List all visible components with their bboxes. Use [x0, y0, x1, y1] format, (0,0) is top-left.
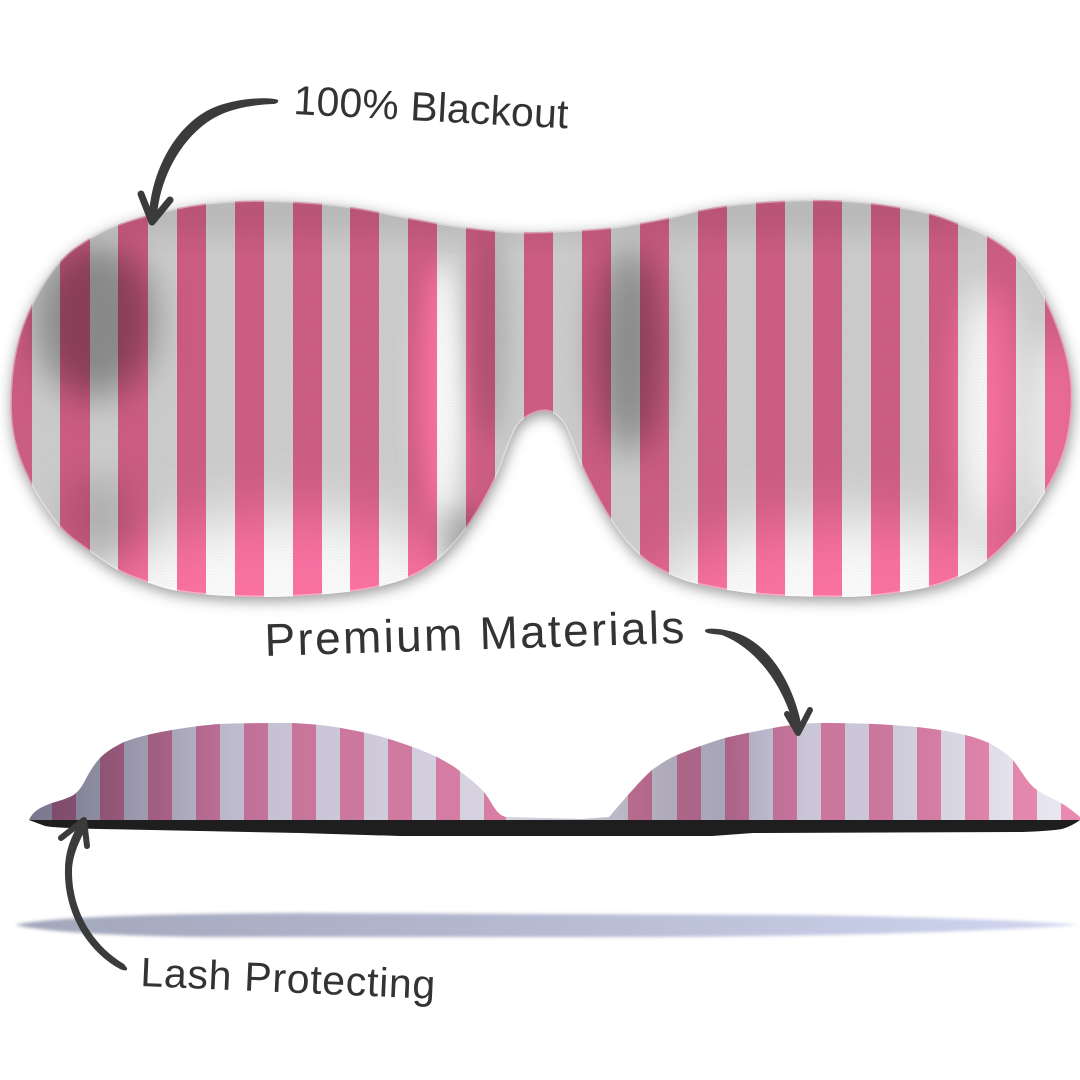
text: Lash Protecting: Lash Protecting	[140, 949, 436, 1008]
arrow: to lash area	[61, 820, 127, 970]
pale rim	[10, 200, 1072, 597]
side shading	[29, 723, 1080, 820]
label: Premium Materials	[264, 601, 810, 733]
fabric shading map	[10, 200, 1072, 583]
arrow: to side mask	[705, 629, 810, 733]
bright lower lobes	[102, 490, 449, 597]
pink stripes, front view	[2, 190, 1074, 610]
side view of striped sleep mask	[29, 723, 1080, 820]
front view of striped sleep mask	[10, 200, 1072, 597]
arrow: to top mask	[141, 98, 278, 222]
floor shadow	[15, 913, 1080, 937]
dark hollows	[35, 242, 155, 398]
soft shadow under top mask	[11, 204, 1073, 601]
bright crescents	[420, 260, 464, 520]
text: Premium Materials: Premium Materials	[264, 601, 685, 666]
top band	[90, 190, 970, 230]
pink stripes, side view	[52, 723, 1080, 820]
side view black base	[29, 820, 1080, 836]
label: 100% Blackout	[141, 77, 570, 222]
text: 100% Blackout: 100% Blackout	[293, 77, 570, 137]
label: Lash Protecting	[61, 820, 436, 1008]
